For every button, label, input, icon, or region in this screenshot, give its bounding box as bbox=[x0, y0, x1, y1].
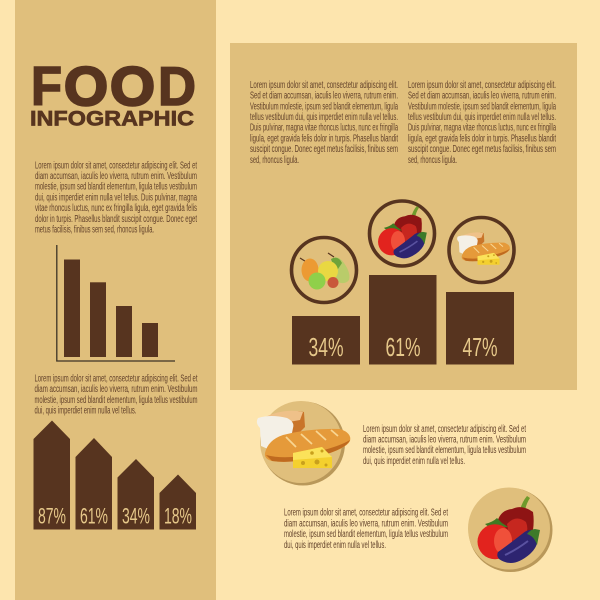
arrow chart: 61% bbox=[80, 504, 108, 528]
icon: bread and cheese bbox=[257, 401, 350, 486]
title bbox=[30, 55, 196, 130]
text block: vegetables: diam accumsan, iaculis leo viverra, rutrum enim. Vestibulum bbox=[284, 518, 448, 530]
text block: column one: Lorem ipsum dolor sit amet, consectetur adipiscing elit. bbox=[250, 80, 398, 91]
text block: bread bbox=[363, 424, 526, 467]
text block: intro: metus facilisis, finibus sem sed, rhoncus ligula. bbox=[35, 224, 154, 236]
arrow chart: 34% bbox=[122, 504, 150, 528]
title: F bbox=[31, 55, 62, 117]
arrow chart: 18% bbox=[164, 504, 192, 528]
text block: left middle: Lorem ipsum dolor sit amet, consectetur adipiscing elit. Sed et bbox=[34, 374, 198, 384]
text block: column one: Vestibulum molestie, ipsum sed blandit elementum, ligula bbox=[250, 102, 398, 112]
text block: column two: sed, rhoncus ligula. bbox=[408, 155, 457, 166]
text block: bread: dui, quis imperdiet enim nulla vel tellus. bbox=[363, 456, 465, 467]
podium bars: 61% bbox=[386, 332, 420, 362]
text block: intro: vitae rhoncus luctus, nunc ex fringilla ligula, eget gravida felis bbox=[35, 203, 197, 214]
text block: column one: tellus vestibulum dui, quis imperdiet enim nulla vel tellus. bbox=[250, 112, 398, 123]
bar chart bbox=[57, 245, 175, 361]
text block: column one: suscipit congue. Donec eget metus facilisis, finibus sem bbox=[250, 144, 398, 155]
text block: intro: diam accumsan, iaculis leo viverra, rutrum enim. Vestibulum bbox=[35, 171, 197, 182]
text block: column one: Duis pulvinar, magna vitae rhoncus luctus, nunc ex fringilla bbox=[250, 122, 398, 134]
icon: vegetables bbox=[468, 488, 552, 572]
text block: column one: Sed et diam accumsan, iaculis leo viverra, rutrum enim. bbox=[250, 90, 398, 102]
text block: intro: molestie, ipsum sed blandit elementum, ligula tellus vestibulum bbox=[35, 182, 197, 192]
title: D bbox=[158, 55, 196, 117]
panel: left column bbox=[15, 0, 216, 600]
podium bars: 47% bbox=[462, 332, 498, 362]
text block: vegetables bbox=[284, 508, 448, 551]
podium bars: 34% bbox=[308, 332, 344, 362]
text block: column one: ligula, eget gravida felis dolor in turpis. Phasellus blandit bbox=[250, 134, 398, 144]
text block: left middle: molestie, ipsum sed blandit elementum, ligula tellus vestibulum bbox=[34, 395, 198, 406]
text block: vegetables: molestie, ipsum sed blandit elementum, ligula tellus vestibulum bbox=[284, 529, 448, 540]
icon: fruit in ring bbox=[292, 238, 356, 302]
text block: intro: dolor in turpis. Phasellus blandit suscipit congue. Donec eget bbox=[35, 214, 197, 225]
icon: vegetables in ring bbox=[370, 201, 434, 266]
text block: left middle bbox=[34, 374, 198, 416]
podium bars bbox=[292, 275, 514, 364]
text block: column one: sed, rhoncus ligula. bbox=[250, 155, 299, 166]
panel: top right bbox=[230, 43, 577, 390]
arrow chart: 87% bbox=[38, 504, 66, 528]
text block: intro: dui, quis imperdiet enim nulla vel tellus. Duis pulvinar, magna bbox=[35, 192, 197, 204]
title: O bbox=[110, 55, 155, 117]
text block: left middle: diam accumsan, iaculis leo viverra, rutrum enim. Vestibulum bbox=[34, 384, 198, 395]
text block: vegetables: dui, quis imperdiet enim nulla vel tellus. bbox=[284, 540, 386, 551]
text block: column one bbox=[250, 80, 398, 166]
text block: vegetables: Lorem ipsum dolor sit amet, consectetur adipiscing elit. Sed et bbox=[284, 508, 448, 518]
title: O bbox=[64, 55, 108, 117]
text block: left middle: dui, quis imperdiet enim nulla vel tellus. bbox=[34, 406, 136, 416]
text block: column two bbox=[408, 80, 556, 166]
icon: bread in ring bbox=[449, 218, 514, 282]
text block: intro: Lorem ipsum dolor sit amet, consectetur adipiscing elit. Sed et bbox=[35, 160, 197, 172]
title: INFOGRAPHIC bbox=[30, 108, 194, 130]
arrow chart bbox=[34, 420, 196, 530]
text block: intro bbox=[35, 160, 197, 236]
